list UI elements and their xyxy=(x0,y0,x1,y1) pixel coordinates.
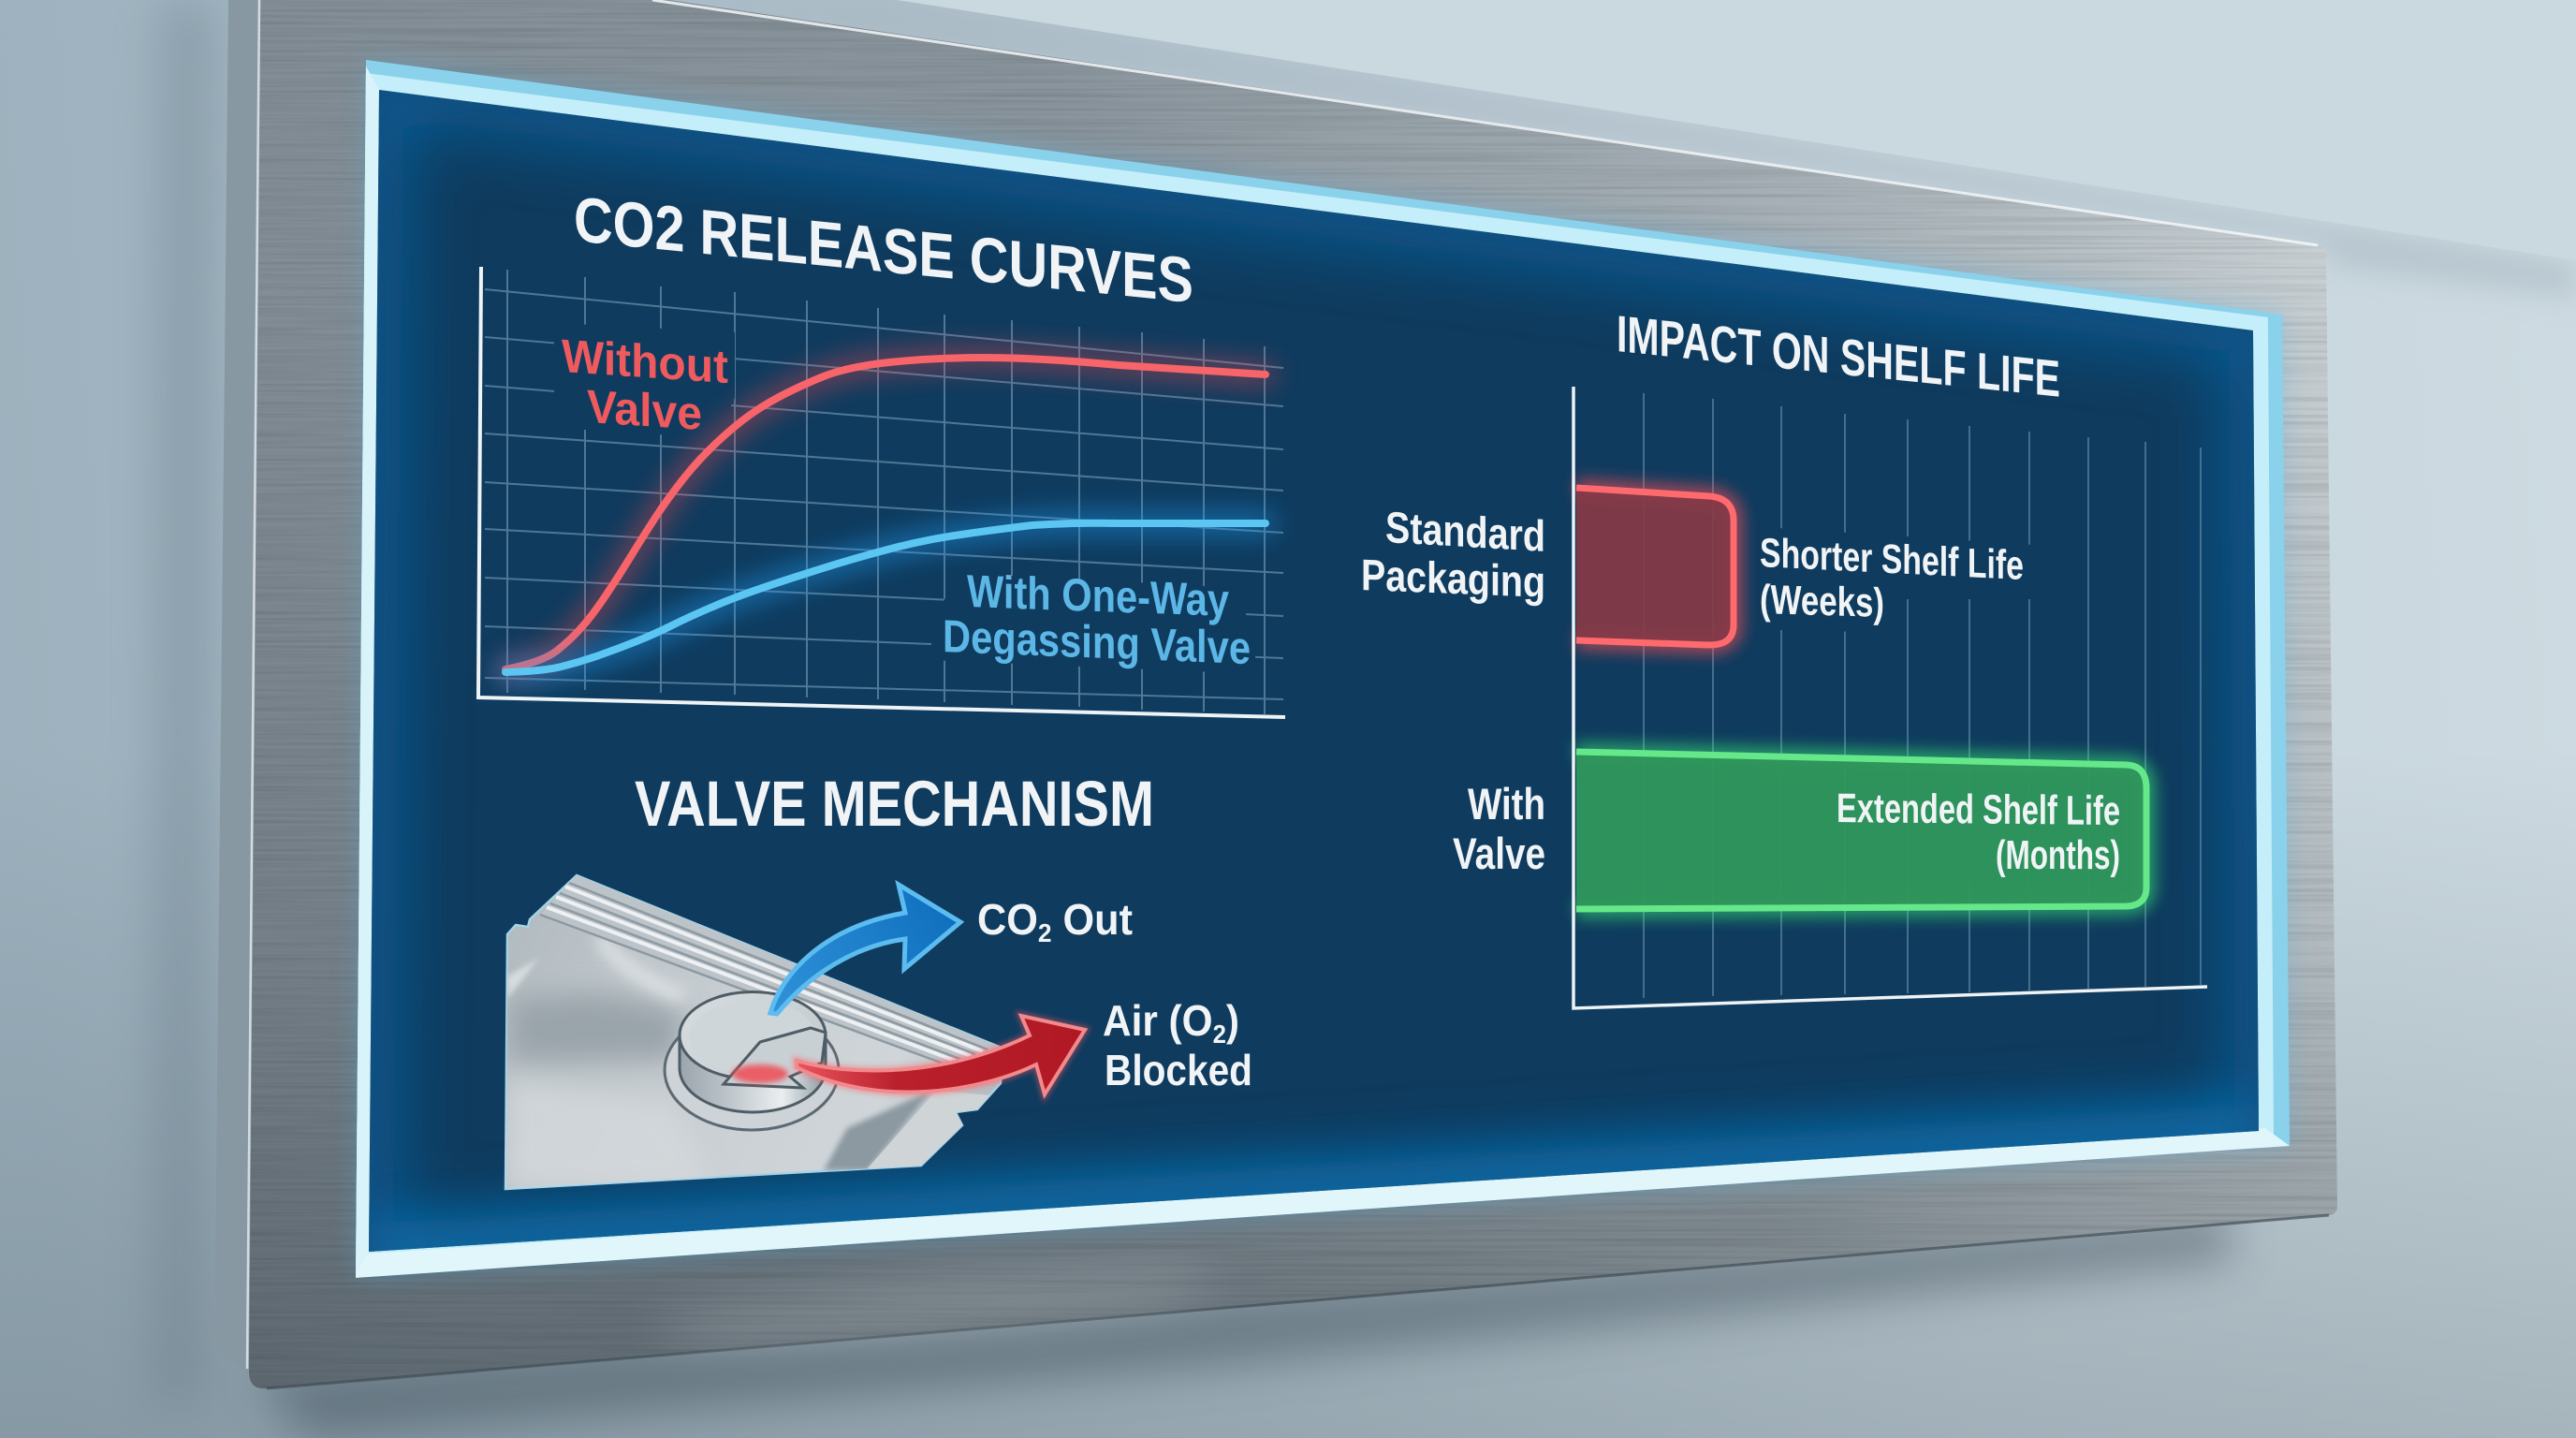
label: with one-way degassing valve: With One-Way xyxy=(967,566,1229,626)
label: with one-way degassing valve: Degassing Valve xyxy=(943,611,1251,674)
chart: shelf life bars xyxy=(1573,387,2207,1008)
label: air blocked: Blocked xyxy=(1105,1046,1252,1094)
label: standard packaging xyxy=(1361,502,1545,607)
label: shorter shelf life: Shorter Shelf Life xyxy=(1760,530,2024,589)
label: CO2 out: 2 xyxy=(1038,918,1052,947)
arrow: CO2 out xyxy=(770,885,960,1014)
red curve: without valve xyxy=(505,358,1266,669)
label backing: with one-way xyxy=(931,573,1259,674)
chart axes xyxy=(478,267,1285,717)
label backing: shorter shelf life xyxy=(1749,526,2033,633)
label: extended shelf life: Extended Shelf Life xyxy=(1837,785,2120,834)
label: shorter shelf life xyxy=(1760,530,2024,626)
title: CO2 release curves: CO2 RELEASE CURVES xyxy=(574,183,1193,316)
label: CO2 out: Out xyxy=(1052,895,1133,944)
label: without valve: Without xyxy=(562,330,728,393)
label: without valve: Valve xyxy=(587,380,702,440)
display screen xyxy=(356,56,2284,1273)
label: air blocked: Air (O xyxy=(1103,996,1222,1045)
label: without valve xyxy=(562,330,728,440)
label: shorter shelf life: (Weeks) xyxy=(1760,577,1884,626)
chart grid xyxy=(1644,393,2201,998)
label: with valve: Valve xyxy=(1453,829,1545,878)
arrow: air blocked xyxy=(797,1016,1085,1094)
foil bag xyxy=(505,875,1003,1189)
chart: CO2 release curves xyxy=(478,267,1285,717)
label: with one-way degassing valve xyxy=(943,566,1251,674)
title: valve mechanism: VALVE MECHANISM xyxy=(635,768,1154,840)
label: CO2 out: CO xyxy=(977,895,1042,944)
label: with valve: With xyxy=(1468,779,1545,829)
chart grid xyxy=(485,270,1283,714)
metal frame xyxy=(214,0,2337,1388)
label: air blocked: 2 xyxy=(1213,1020,1226,1049)
label: air blocked: ) xyxy=(1226,996,1239,1045)
chart axes xyxy=(1573,387,2207,1008)
bar: with valve xyxy=(1576,752,2146,909)
illustration: foil bag with valve xyxy=(505,875,1085,1189)
label: air blocked xyxy=(1103,996,1252,1094)
label: with valve xyxy=(1453,779,1545,878)
blue curve: with valve xyxy=(505,523,1266,672)
bar: standard packaging xyxy=(1576,488,1734,645)
label: extended shelf life: (Months) xyxy=(1996,832,2120,878)
label backing: without valve xyxy=(554,323,735,438)
label: extended shelf life xyxy=(1837,785,2120,878)
valve xyxy=(665,992,839,1130)
label: standard packaging: Standard xyxy=(1385,502,1545,561)
label: standard packaging: Packaging xyxy=(1361,550,1545,607)
title: impact on shelf life: IMPACT ON SHELF LIFE xyxy=(1617,304,2060,408)
illuminated light band xyxy=(354,56,2290,1278)
